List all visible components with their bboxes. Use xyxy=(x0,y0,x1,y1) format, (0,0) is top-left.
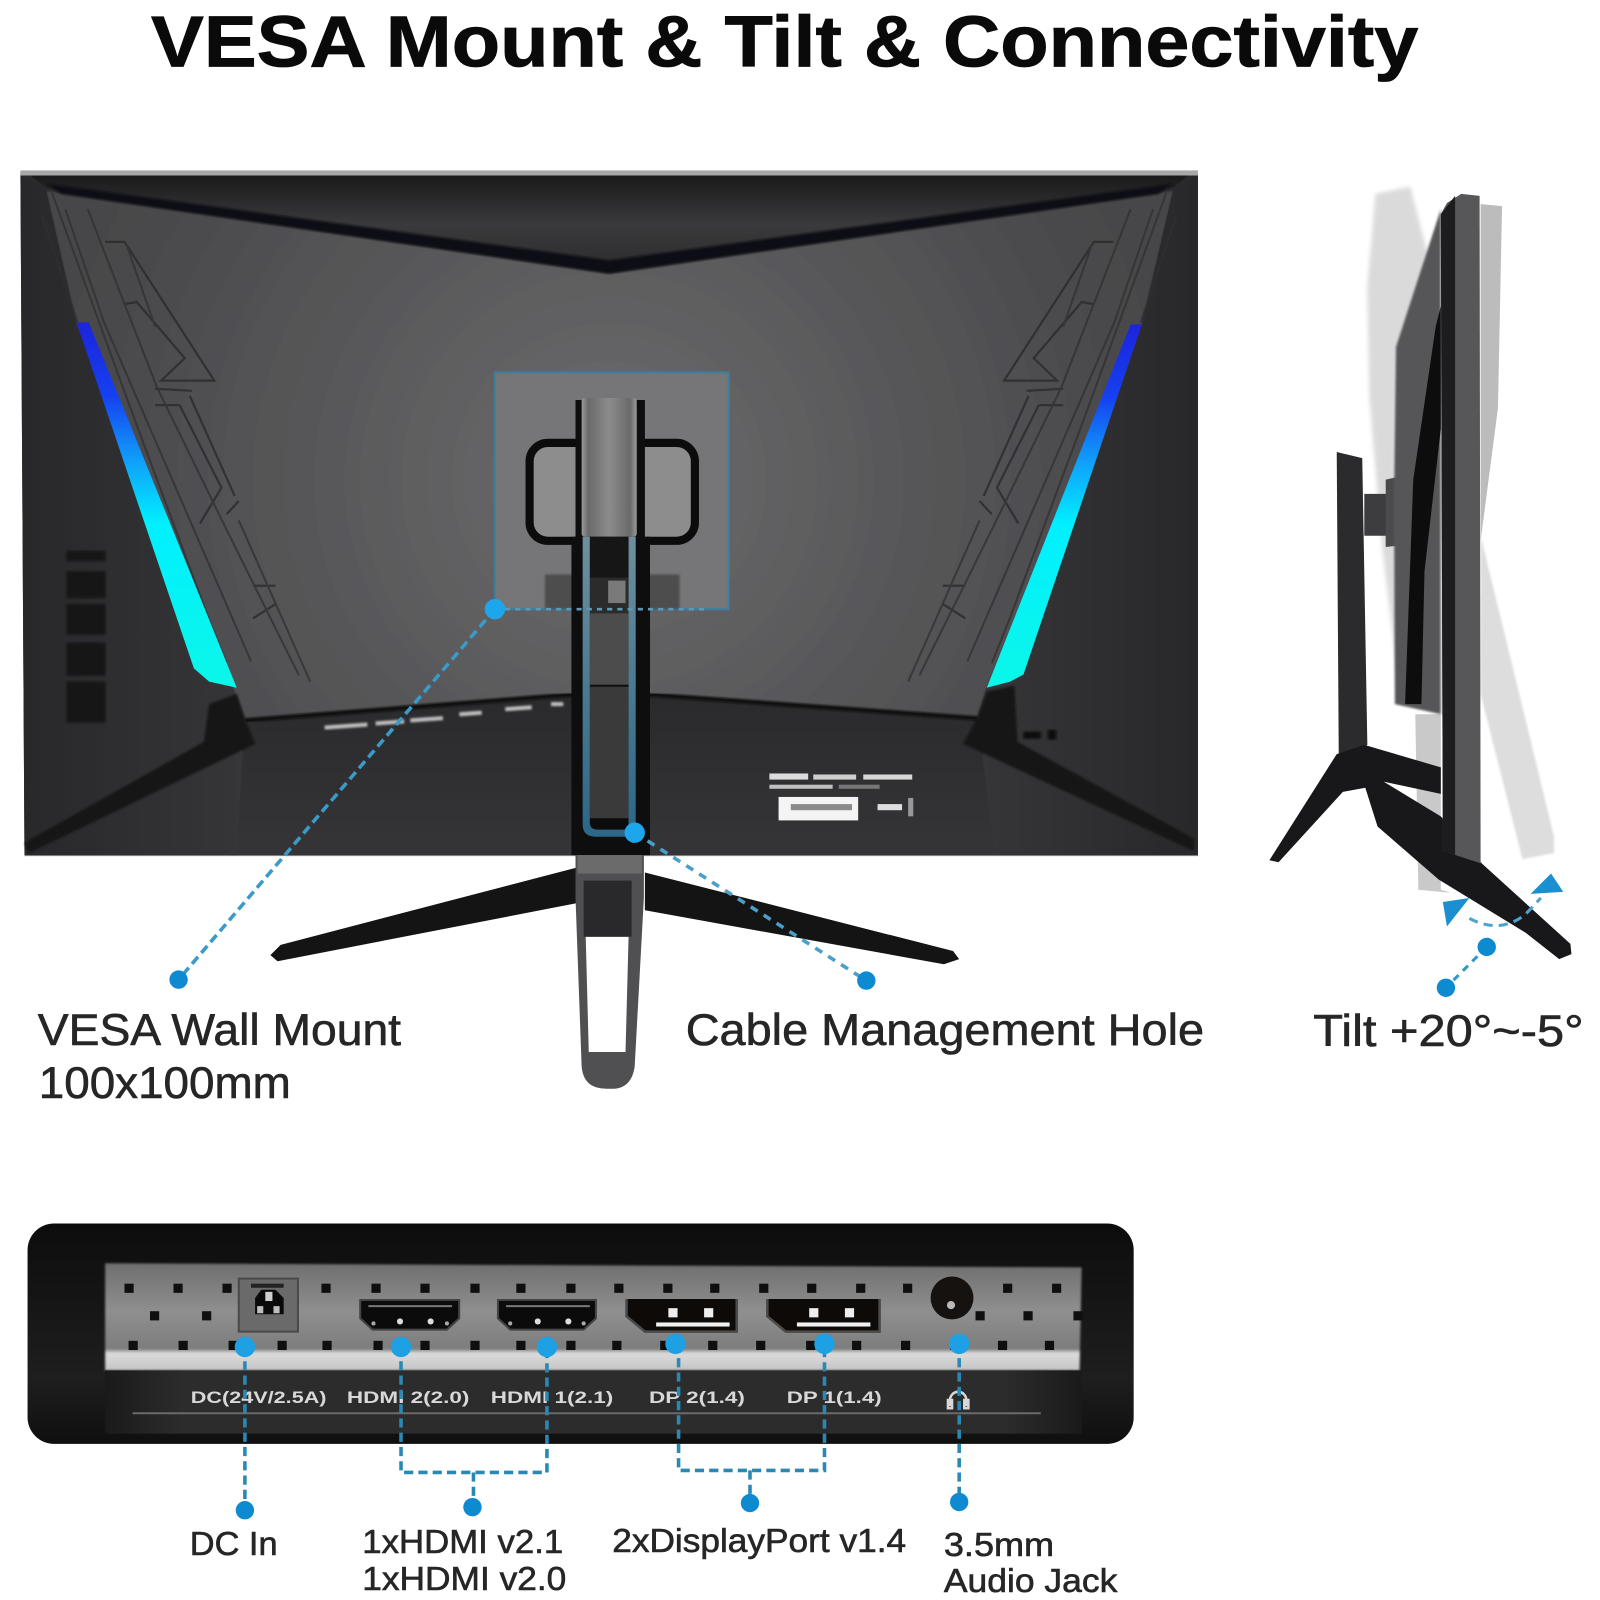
lower legend strip xyxy=(105,1370,1082,1434)
label: HDMI v2.0: 1xHDMI v2.0 xyxy=(362,1561,566,1598)
right corner block xyxy=(963,686,1194,851)
cable slot lower xyxy=(590,687,629,818)
lower dark band xyxy=(230,694,995,855)
top chevron band xyxy=(31,176,1188,273)
tilt arrow right xyxy=(1531,873,1563,894)
right side panel xyxy=(978,176,1198,855)
neck top cover xyxy=(582,398,637,537)
monitor body xyxy=(20,172,1198,855)
side stand pole xyxy=(1337,452,1367,760)
tilt arc xyxy=(1469,898,1541,926)
cable slot mid xyxy=(590,613,629,685)
label: 3.5mm: 3.5mm xyxy=(944,1527,1054,1564)
monitor rear profile xyxy=(1394,209,1441,714)
stand lower neck xyxy=(576,855,644,1089)
port legend: headphone icon xyxy=(948,1392,968,1408)
label: Audio Jack: Audio Jack xyxy=(944,1563,1118,1600)
port: DisplayPort 2 xyxy=(627,1299,737,1332)
left RGB light strip xyxy=(77,322,237,688)
left stand arm xyxy=(270,867,578,961)
cable slot bottom xyxy=(590,818,629,835)
callout: audio leader xyxy=(949,1334,969,1511)
label: 100x100mm: 100x100mm xyxy=(39,1057,291,1108)
label: VESA wall mount: VESA Wall Mount xyxy=(38,1004,402,1055)
tilt dot upper xyxy=(1478,938,1496,956)
cable slot upper xyxy=(590,537,629,582)
VESA mount plate xyxy=(495,372,729,609)
callout: DisplayPort bracket xyxy=(665,1334,835,1512)
side stand feet xyxy=(1269,745,1571,959)
model print row xyxy=(324,702,563,730)
tilt leader xyxy=(1446,947,1487,988)
callout: HDMI bracket xyxy=(391,1337,557,1516)
neck upper black frame xyxy=(576,400,645,543)
left decorative relief xyxy=(42,193,310,682)
port panel body xyxy=(28,1223,1134,1444)
callout: cable hole leader xyxy=(624,822,876,990)
left cable guide xyxy=(583,537,629,837)
right decorative relief xyxy=(908,193,1177,682)
title: VESA Mount & Tilt & Connectivity xyxy=(151,1,1418,82)
panel: side tilt view xyxy=(1269,187,1571,997)
panel: monitor rear view xyxy=(20,170,1198,856)
tilt hinge xyxy=(1364,494,1388,536)
label: cable management hole: Cable Management Hole xyxy=(686,1004,1204,1055)
callout: VESA leader xyxy=(169,599,704,989)
label: DisplayPort: 2xDisplayPort v1.4 xyxy=(612,1523,906,1560)
stand base front xyxy=(270,855,959,1089)
port legend: DC: DC(24V/2.5A) xyxy=(191,1389,327,1407)
port: HDMI 1 xyxy=(498,1300,596,1330)
right RGB light strip xyxy=(987,324,1142,688)
tilt dot lower xyxy=(1437,979,1455,997)
rear black stripe xyxy=(1405,306,1441,704)
lower neck dark recess xyxy=(584,881,632,937)
perforation dots xyxy=(124,1284,1083,1350)
cable slot vent xyxy=(590,578,629,613)
port: DC in xyxy=(239,1279,298,1332)
forward tilt ghost lower xyxy=(1481,536,1554,859)
regulatory print on left edge xyxy=(66,551,105,722)
label: tilt range: Tilt +20°~-5° xyxy=(1313,1005,1584,1056)
VESA screw cover xyxy=(530,443,695,541)
right side ventilation marks xyxy=(1023,730,1056,740)
right cable guide xyxy=(629,537,636,833)
port: audio jack xyxy=(931,1277,973,1319)
label: HDMI v2.1: 1xHDMI v2.1 xyxy=(362,1524,563,1561)
stand ghost xyxy=(1415,714,1451,893)
panel: port panel xyxy=(28,1223,1134,1444)
chevron shadow xyxy=(46,184,1173,273)
left corner block xyxy=(24,694,255,853)
port panel recess xyxy=(105,1263,1082,1370)
central gray panel xyxy=(46,191,1173,719)
port legend: DP 1: DP 1(1.4) xyxy=(787,1389,882,1407)
port legend: DP 2: DP 2(1.4) xyxy=(649,1389,745,1407)
neck lower black frame xyxy=(571,537,650,855)
rating label xyxy=(769,773,913,820)
monitor upright profile xyxy=(1441,194,1481,863)
left side panel xyxy=(20,176,245,855)
callout: DC in leader xyxy=(235,1337,255,1519)
port: HDMI 2 xyxy=(360,1300,459,1330)
forward tilt ghost upper xyxy=(1481,204,1502,541)
port: DisplayPort 1 xyxy=(767,1299,880,1332)
label: DC In: DC In xyxy=(190,1526,278,1563)
port legend: HDMI 1: HDMI 1(2.1) xyxy=(491,1389,613,1407)
tilt arrow left xyxy=(1443,898,1469,927)
vent cutouts xyxy=(545,574,680,609)
port legend: HDMI 2: HDMI 2(2.0) xyxy=(347,1389,469,1407)
rear tilt ghost xyxy=(1367,187,1431,694)
stand neck xyxy=(571,398,650,855)
right stand arm xyxy=(645,872,959,964)
